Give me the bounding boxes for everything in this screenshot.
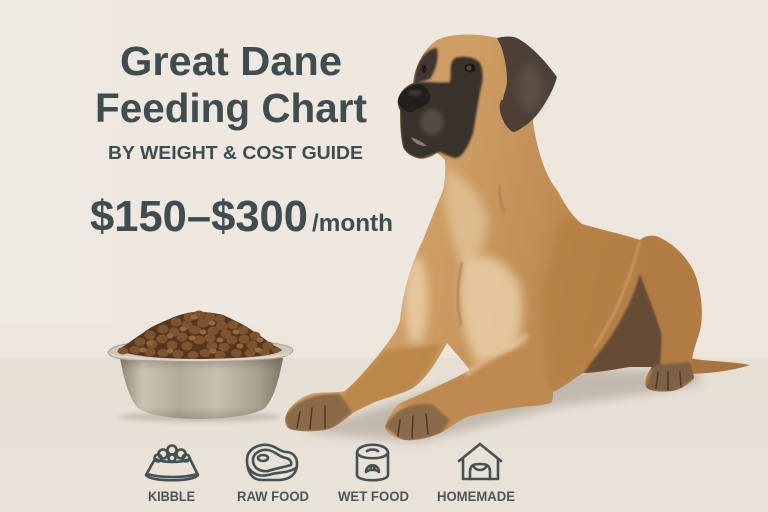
left eye patch — [414, 48, 438, 84]
eye right — [464, 64, 476, 72]
nose — [398, 84, 430, 112]
subtitle: BY WEIGHT & COST GUIDE — [108, 143, 363, 163]
price range: /month — [312, 210, 393, 237]
left leg tone — [342, 344, 440, 420]
grey muzzle highlight — [420, 109, 444, 135]
tail — [688, 358, 750, 374]
great dane — [284, 34, 750, 442]
nostril sheen — [408, 90, 422, 96]
title — [95, 38, 367, 131]
neck wrinkle — [499, 185, 504, 212]
haunch — [640, 238, 700, 368]
back paw — [645, 362, 695, 392]
label: HOMEMADE — [437, 488, 515, 504]
food type icon: homemade — [437, 444, 515, 504]
chest highlight — [460, 256, 522, 368]
title: Feeding Chart — [95, 85, 367, 131]
label: KIBBLE — [148, 488, 195, 504]
right body tone — [540, 215, 640, 392]
neck light — [445, 165, 487, 268]
ear highlight — [518, 64, 542, 112]
floor — [0, 358, 768, 512]
baseboard — [0, 321, 768, 359]
label: RAW FOOD — [237, 488, 309, 504]
lip — [411, 137, 427, 146]
food type icon: wet food — [338, 445, 409, 504]
shoulder highlight — [404, 255, 428, 345]
title: Great Dane — [120, 38, 342, 84]
price range: $150–$300 — [90, 192, 308, 241]
breast fold — [458, 262, 462, 325]
eye left — [422, 65, 426, 73]
food bowl with kibble — [108, 310, 293, 422]
ear fold — [495, 40, 505, 100]
muzzle mask — [398, 57, 483, 159]
right paw — [385, 404, 450, 442]
belly shadow — [583, 273, 664, 374]
forearm highlight — [465, 335, 528, 375]
food type icon: raw food — [237, 445, 309, 504]
front rim edge — [112, 354, 289, 360]
dog body — [285, 34, 702, 440]
bowl body — [120, 358, 283, 419]
dog floor shadow — [300, 368, 700, 442]
bowl rim — [108, 343, 293, 361]
ear — [497, 36, 557, 132]
label: WET FOOD — [338, 488, 409, 504]
kibble pile — [118, 310, 282, 359]
fur shading — [284, 48, 700, 442]
left paw — [284, 394, 352, 432]
background wall — [0, 0, 768, 360]
toe lines — [297, 372, 681, 438]
haunch edge highlight — [594, 242, 640, 348]
near leg tone — [400, 345, 555, 433]
food type icon: kibble — [146, 446, 198, 504]
